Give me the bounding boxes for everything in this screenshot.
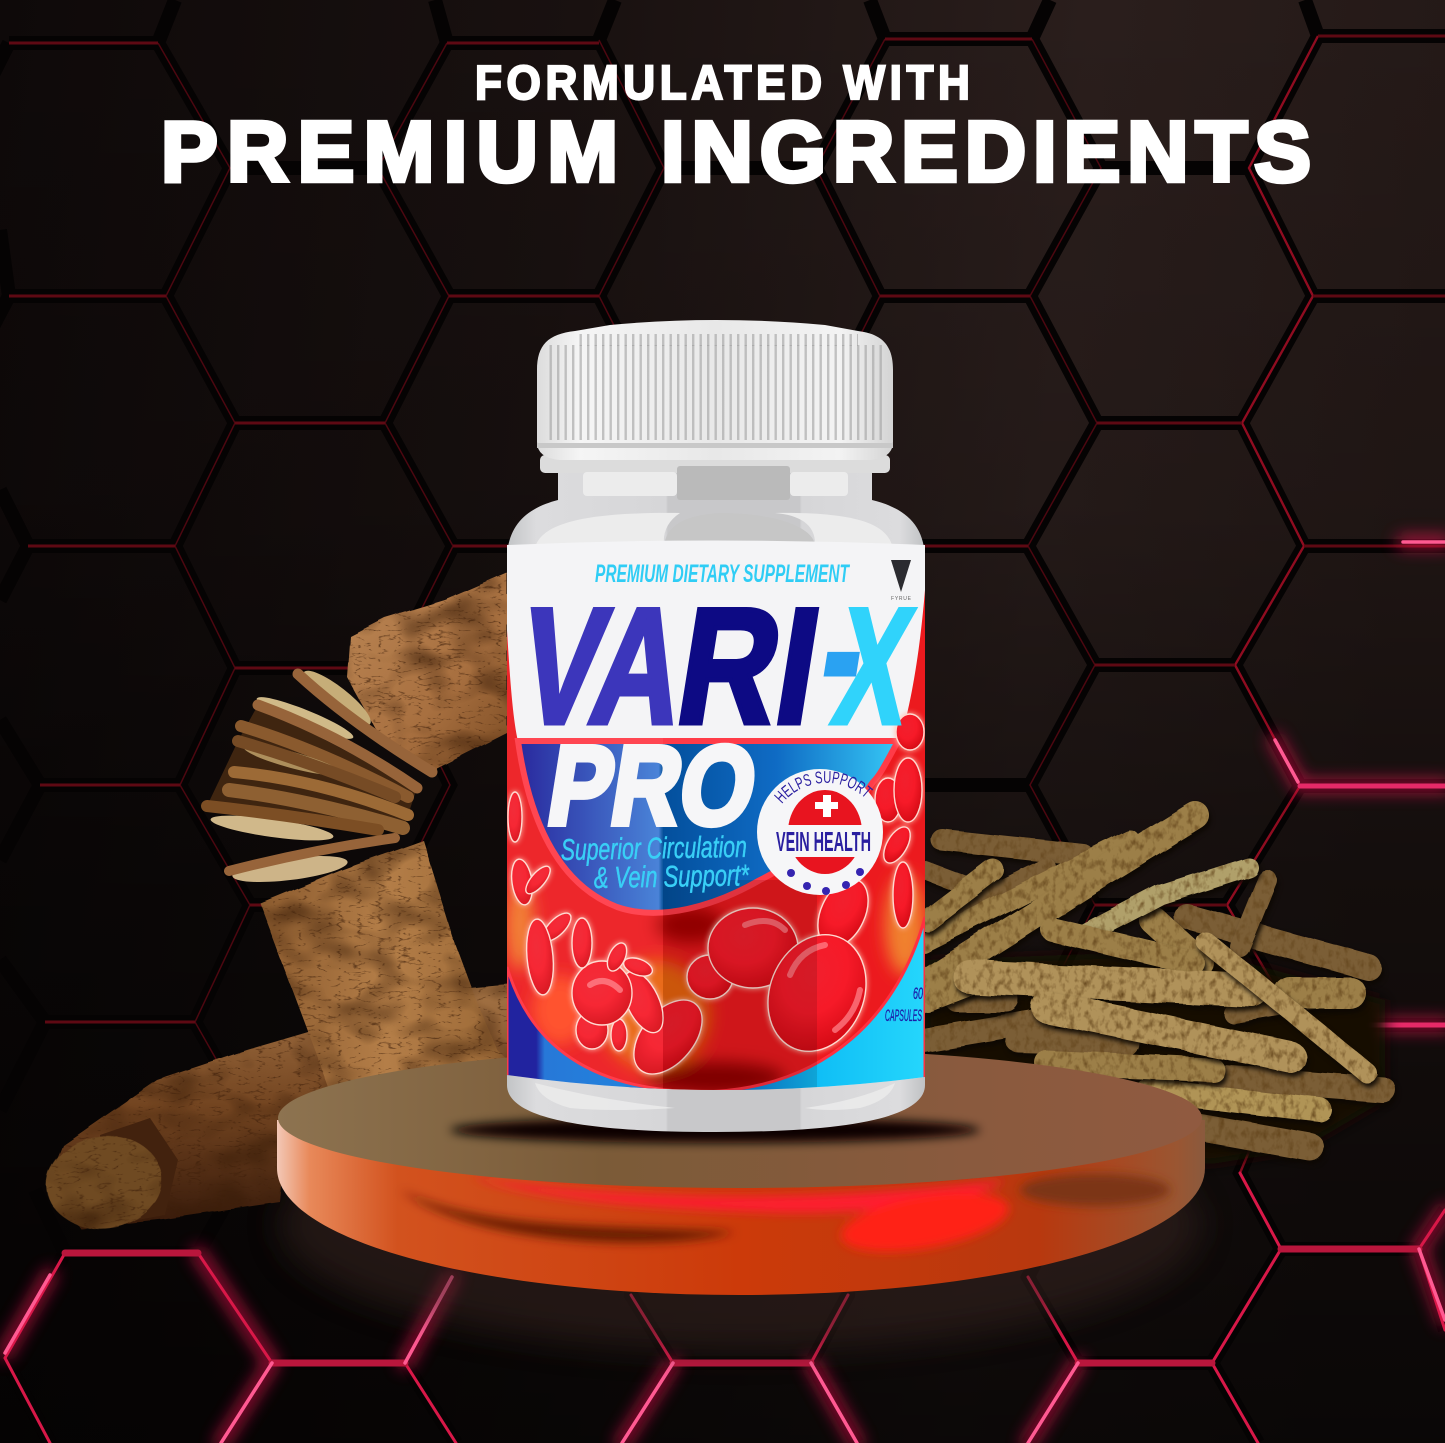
bottle label [507,540,925,1090]
bottle cap [537,320,893,460]
brand logo [891,560,912,602]
root cut end [40,1128,168,1236]
podium reflection [280,1100,1200,1350]
infographic scene: CAPSULES [885,1006,922,1025]
bottle shadow [450,1117,980,1143]
label lower colour sweep [507,916,925,1090]
podium shading and highlights [400,1174,1170,1262]
product tagline: Superior Circulation [561,831,747,867]
product name [530,607,918,726]
product name: VA [508,575,697,759]
root collar [100,1118,178,1225]
label red field [507,590,925,1095]
title line one: FORMULATED WITH [475,55,970,109]
bottle neck highlights [536,455,892,545]
neon glow lines [5,542,1445,1443]
podium side [277,1120,1205,1295]
back sticks [923,840,1383,1147]
vein health badge [757,769,883,895]
title [161,55,1311,200]
bottle base highlights [535,1083,895,1110]
label blue bowl [518,741,898,913]
label field orange glow [506,875,925,1094]
blood cells [508,714,924,1087]
product name: RI [666,575,831,759]
label top text: PREMIUM DIETARY SUPPLEMENT [595,560,851,588]
capsule count [885,987,923,1022]
front sticks [970,943,1367,1073]
product name: X [824,575,923,759]
title line two: INGREDIENTS [661,105,1311,200]
podium top [278,1048,1202,1188]
middle sticks [923,815,1350,1110]
bottle body [507,470,925,1132]
ashwagandha root pile [923,815,1385,1165]
cassava trunk [260,840,510,1090]
vein health badge: HELPS SUPPORT [774,771,874,804]
label reflection [507,530,817,1110]
bottom-left long root [47,985,510,1228]
bottle [507,320,925,1132]
cell highlights [590,921,860,1030]
upper cassava root [347,573,507,772]
podium [277,1048,1205,1295]
product tagline: & Vein Support* [594,859,750,895]
cassava slices [207,663,432,887]
product name: - [810,559,877,743]
product tagline [561,835,750,893]
capsule count: 60 [913,984,923,1003]
product sub-name: PRO [540,723,765,848]
title line two: PREMIUM [161,105,618,200]
cassava root pile [40,573,510,1236]
brand logo: FYRUE [891,596,912,602]
vein health badge: VEIN HEALTH [776,826,871,857]
